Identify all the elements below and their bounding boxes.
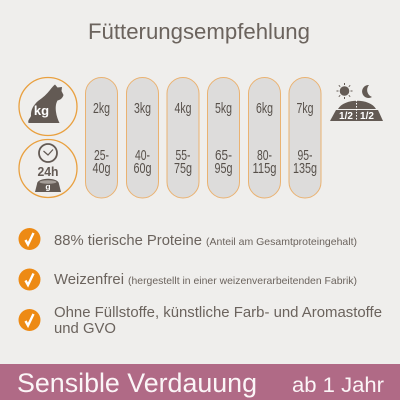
pill: 3kg: 3kg bbox=[134, 100, 151, 117]
text: wheat free: Weizenfrei bbox=[54, 272, 124, 288]
icon: sun and moon half portions: 1/2 bbox=[360, 111, 374, 122]
text: no fillers: und GVO bbox=[54, 321, 116, 337]
check icon: proteins bbox=[18, 228, 40, 250]
title: Fütterungsempfehlung bbox=[88, 19, 310, 44]
pill: 2kg: 40g bbox=[92, 160, 110, 177]
pill: 3kg bbox=[126, 78, 158, 198]
pill: 2kg bbox=[86, 78, 118, 198]
banner: ab 1 Jahr bbox=[292, 374, 384, 397]
pill: 7kg: 95- bbox=[298, 147, 312, 164]
pill: 4kg: 55- bbox=[176, 147, 190, 164]
pill: 6kg bbox=[248, 78, 280, 198]
pill: 7kg: 135g bbox=[293, 160, 317, 177]
pill: 7kg: 7kg bbox=[296, 100, 314, 117]
icon: sun and moon half portions bbox=[330, 83, 383, 122]
pill: 6kg: 115g bbox=[252, 160, 276, 177]
banner bbox=[0, 364, 400, 400]
pill: 4kg: 75g bbox=[174, 160, 192, 177]
icon: daily grams: g bbox=[45, 182, 51, 192]
pill: 3kg: 40- bbox=[135, 147, 150, 164]
text: wheat free: (hergestellt in einer weizenverarbeitenden Fabrik) bbox=[128, 275, 357, 287]
text: no fillers: Ohne Füllstoffe, künstliche Farb- und Aromastoffe bbox=[54, 305, 382, 321]
icon: sun and moon half portions: 1/2 bbox=[339, 111, 353, 122]
pill: 5kg: 65- bbox=[215, 147, 232, 164]
text: no fillers bbox=[54, 305, 382, 337]
pill: 4kg: 4kg bbox=[174, 100, 192, 117]
banner: Sensible Verdauung bbox=[17, 368, 257, 398]
text: proteins: (Anteil am Gesamtproteingehalt) bbox=[206, 236, 357, 248]
pill: 2kg: 25- bbox=[94, 147, 109, 164]
pill: 2kg: 2kg bbox=[93, 100, 110, 117]
pill: 6kg: 80- bbox=[257, 147, 272, 164]
text: proteins: 88% tierische Proteine bbox=[54, 233, 202, 249]
icon: cat weight: kg bbox=[34, 103, 49, 118]
text: proteins bbox=[54, 233, 357, 249]
text: wheat free bbox=[54, 272, 357, 288]
pill: 7kg bbox=[289, 78, 321, 198]
check icon: wheat free bbox=[18, 268, 40, 290]
pill: 5kg bbox=[208, 78, 240, 198]
pill: 3kg: 60g bbox=[134, 160, 152, 177]
pill: 5kg: 95g bbox=[214, 160, 232, 177]
pill: 4kg bbox=[167, 78, 199, 198]
icon: cat weight bbox=[19, 78, 77, 136]
check icon: no fillers bbox=[18, 309, 40, 331]
icon: daily grams: 24h bbox=[38, 164, 59, 179]
pill: 5kg: 5kg bbox=[215, 100, 232, 117]
pill: 6kg: 6kg bbox=[256, 100, 273, 117]
icon: daily grams bbox=[19, 140, 77, 198]
